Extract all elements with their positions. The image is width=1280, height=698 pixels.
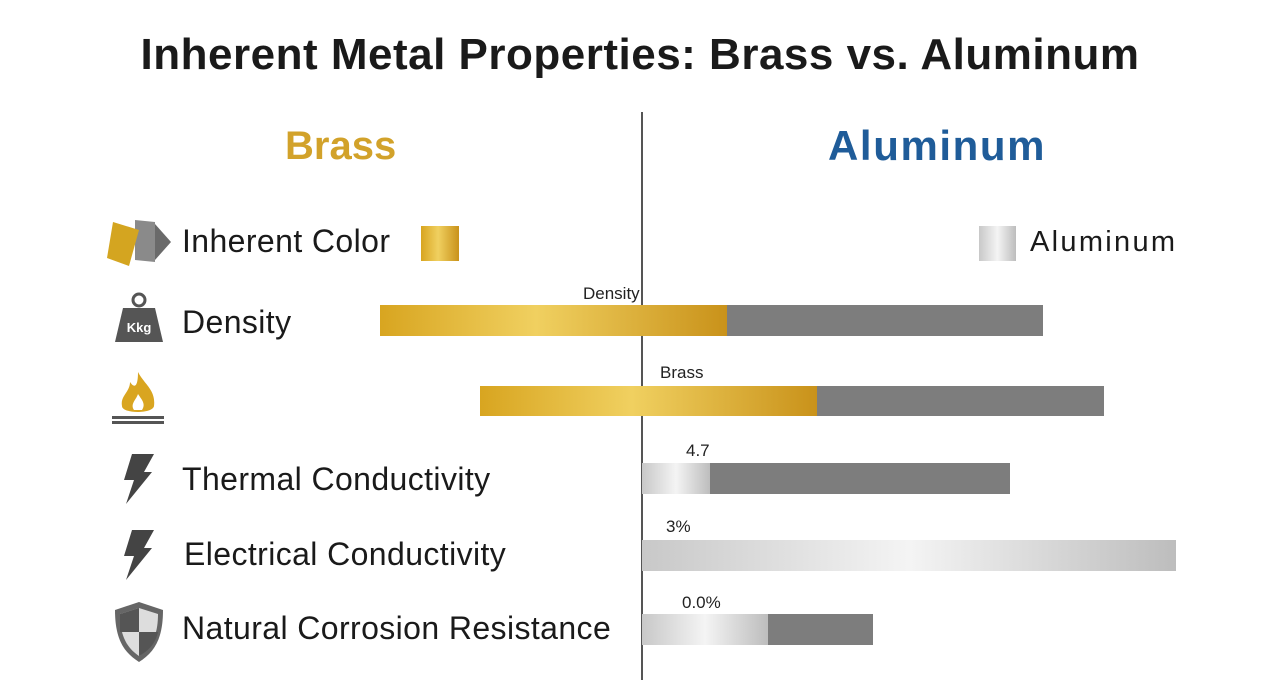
bar label: 4.7: 4.7	[686, 441, 710, 460]
bar: thermal	[642, 463, 1010, 494]
bar: heat	[480, 386, 1104, 416]
title: Inherent Metal Properties: Brass vs. Aluminum	[141, 30, 1139, 79]
label: Density: Density	[182, 304, 292, 340]
swatch: aluminum	[979, 226, 1016, 261]
heading: Brass: Brass	[285, 124, 396, 168]
icon: color swatches	[107, 220, 171, 266]
bar label: Density: Density	[583, 284, 640, 303]
label: Aluminum swatch: Aluminum	[1030, 226, 1177, 258]
label: Inherent Color: Inherent Color	[182, 223, 390, 259]
icon: weight	[115, 292, 163, 342]
icon: bolt thermal	[124, 454, 154, 504]
divider line	[641, 112, 643, 680]
icon: bolt electrical	[124, 530, 154, 580]
label: Thermal Conductivity: Thermal Conductivity	[182, 461, 491, 497]
swatch: brass	[421, 226, 459, 261]
label: Electrical Conductivity: Electrical Conductivity	[184, 536, 506, 572]
bar: electrical	[642, 540, 1176, 571]
bar: corrosion	[642, 614, 873, 645]
bar label: 0.0%: 0.0%	[682, 593, 721, 612]
icon: weight: Kkg	[127, 320, 151, 335]
heading: Aluminum: Aluminum	[828, 122, 1046, 169]
label: Natural Corrosion Resistance: Natural Corrosion Resistance	[182, 610, 611, 646]
icon: shield	[115, 602, 163, 662]
icon: flame	[112, 372, 164, 424]
bar: density	[380, 305, 1043, 336]
bar label: Brass: Brass	[660, 363, 703, 382]
bar label: 3%: 3%	[666, 517, 691, 536]
